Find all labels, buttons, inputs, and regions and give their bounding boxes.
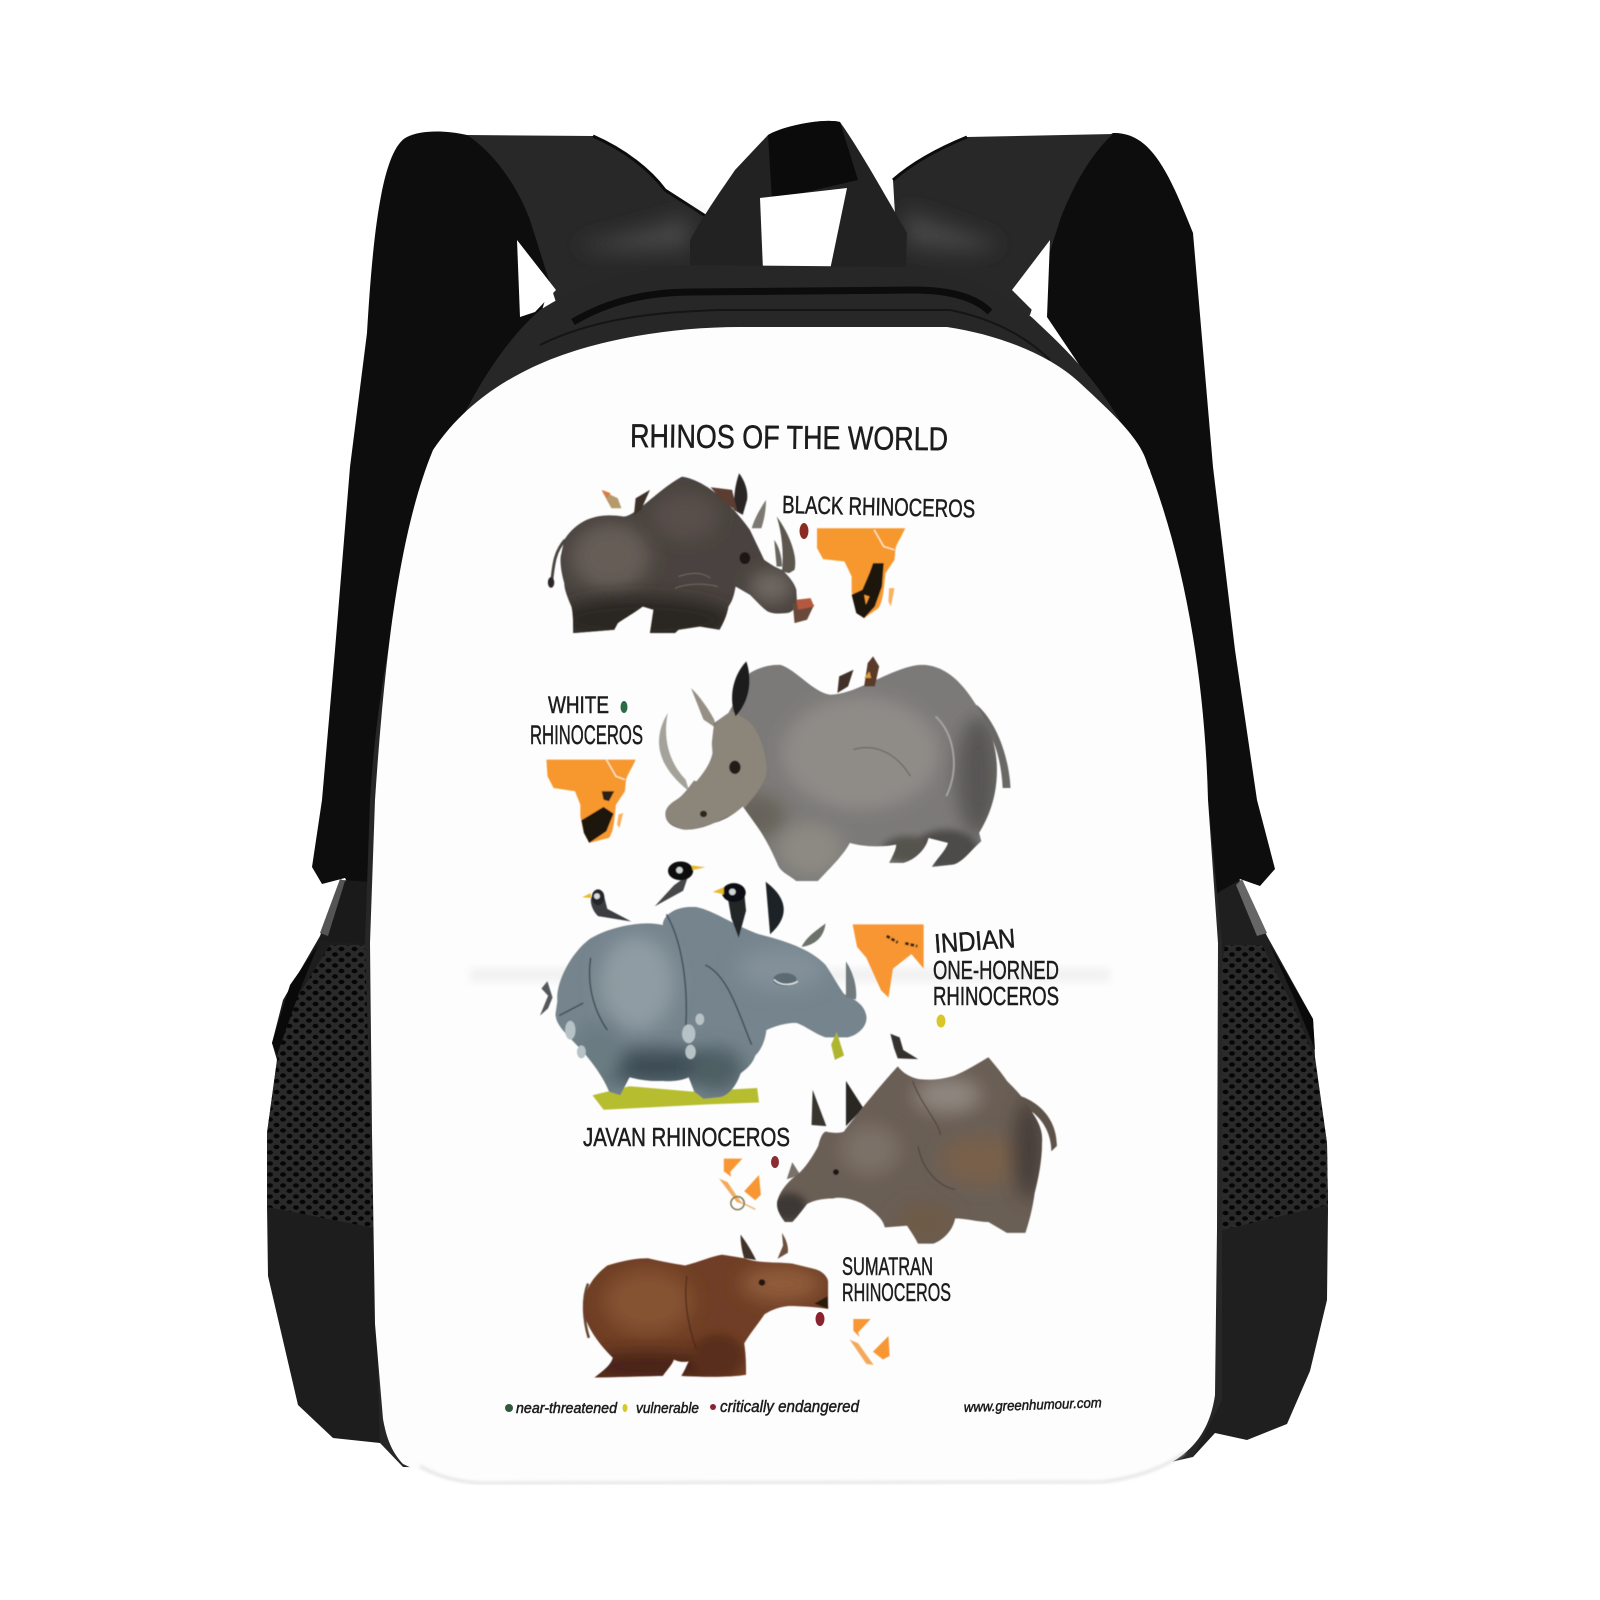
status dot: vulnerable [936, 1014, 946, 1028]
range map: south-east Asia [850, 1319, 890, 1365]
illustration: black rhino [547, 472, 815, 634]
backpack product illustration [267, 120, 1328, 1485]
illustration: javan rhino [770, 1034, 1057, 1247]
label: one-horned: ONE-HORNED [933, 955, 1059, 985]
legend [505, 1397, 859, 1417]
legend item: near-threatened: near-threatened [516, 1400, 618, 1417]
panel: black rhinoceros [547, 472, 974, 634]
label: indian: INDIAN [933, 923, 1016, 959]
range map: Africa [546, 760, 636, 843]
title: RHINOS OF THE WORLD [630, 417, 948, 457]
label: rhinoceros: RHINOCEROS [933, 981, 1059, 1011]
label: sumatran: SUMATRAN [842, 1253, 933, 1281]
legend item: critically endangered: critically endangered [720, 1397, 859, 1416]
status dot: critically endangered [800, 523, 808, 539]
legend item: vulnerable: vulnerable [636, 1400, 699, 1417]
panel: javan rhinoceros [583, 1034, 1057, 1247]
panel: indian one-horned rhinoceros [537, 861, 1059, 1113]
top carry handle [690, 121, 907, 300]
left side pocket [267, 879, 395, 1443]
panel: sumatran rhinoceros [574, 1233, 951, 1381]
label: rhinoceros: RHINOCEROS [842, 1279, 951, 1307]
panel: white rhinoceros [530, 656, 1014, 886]
label: black rhinoceros: BLACK RHINOCEROS [782, 491, 975, 523]
oxpecker birds [582, 861, 746, 938]
label: rhinoceros: RHINOCEROS [530, 720, 643, 750]
right shoulder strap [893, 133, 1275, 945]
left shoulder strap [312, 131, 707, 945]
illustration: white rhino [657, 656, 1014, 886]
illustration: sumatran rhino [574, 1233, 833, 1381]
gaps between straps and body [517, 240, 1050, 317]
range map: south-east Asia [719, 1159, 761, 1210]
right side pocket [1193, 879, 1328, 1457]
status dot: critically endangered [816, 1312, 824, 1326]
grass [592, 1086, 759, 1110]
backpack main body rim [365, 265, 1222, 1478]
illustration: indian rhino [537, 861, 888, 1113]
website credit: www.greenhumour.com [964, 1394, 1102, 1415]
white front panel [370, 327, 1218, 1483]
range map: India [853, 924, 924, 998]
status dot: near-threatened [620, 701, 628, 713]
label: white: WHITE [548, 692, 609, 719]
range map: Africa [817, 528, 905, 618]
status dot: critically endangered [771, 1156, 779, 1168]
label: javan rhinoceros: JAVAN RHINOCEROS [583, 1122, 790, 1152]
